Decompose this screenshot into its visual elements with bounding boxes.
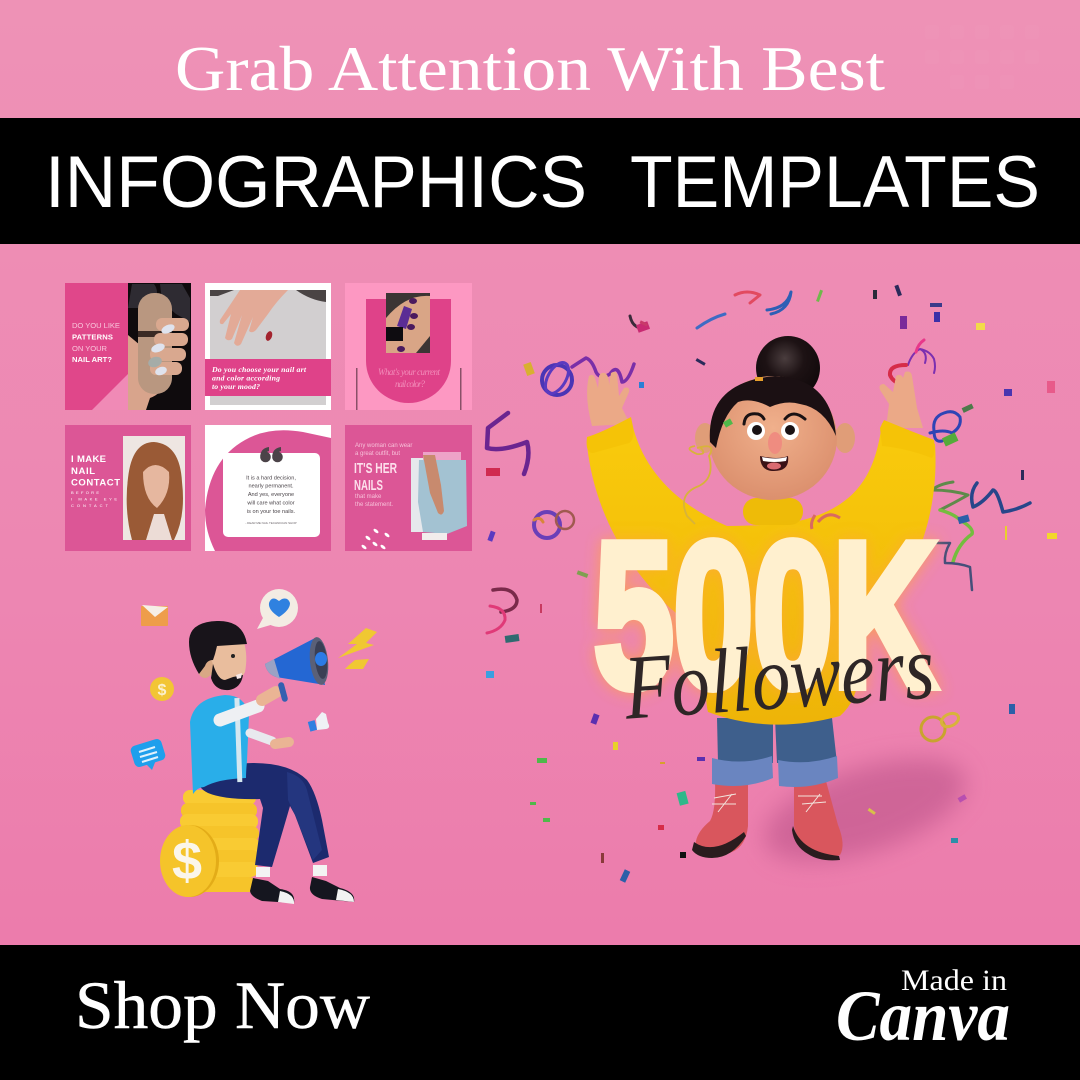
icon: thumbs up [308,712,329,732]
panel: current nail color [345,283,472,410]
big number: 500K: 500K [594,500,936,730]
panel: patterns on your nail art: NAIL ART? [72,355,112,364]
panel: hard decision quote: It is a hard decision, [246,476,296,482]
panel: choose your nail art: Do you choose your nail art [211,365,307,374]
badge: Made in Canva: Canva [836,976,1010,1056]
panel: current nail color: What's your current [378,367,440,377]
hair bun [756,336,820,400]
coin stack [180,790,260,892]
gold streamer [684,446,711,524]
shoes [250,865,354,904]
shorts and cuffs [712,718,838,787]
panel: hard decision quote: will care what color [246,500,295,506]
collar [743,498,803,525]
panel: hard decision quote [205,425,331,551]
face [744,414,805,471]
panel: patterns on your nail art: DO YOU LIKE [72,321,120,330]
panel: I make nail contact: I MAKE EYE [71,496,117,502]
icon: dollar coin small [150,677,174,701]
panel: it's her nails: NAILS [354,477,383,494]
big dollar coin [160,825,219,897]
panel: patterns on your nail art: PATTERNS [72,332,113,342]
panel: it's her nails: a great outfit, but [355,451,400,457]
panel: choose your nail art: and color according [212,374,280,382]
panel: I make nail contact: CONTACT [71,503,109,508]
heading: Infographics Templates [45,142,1040,223]
hair [710,376,836,448]
sleeve cuffs [587,417,935,458]
ears [695,423,855,453]
badge: Made in Canva: Made in [901,964,1007,997]
panel: it's her nails: Any woman can wear [355,443,412,449]
illustration: woman character [587,336,978,882]
panel: it's her nails: IT'S HER [354,460,397,477]
heading: Infographics Templates: TEMPLATES [630,142,1040,223]
script: Followers: Followers [620,615,937,739]
right hand [880,372,923,428]
panel: hard decision quote: - DEAR ME NAIL TECHNICIAN SHOP [245,521,297,525]
panel: it's her nails [345,425,472,551]
panel: choose your nail art [205,283,331,410]
arms and sweater [587,423,936,725]
call to action: Shop Now: Shop Now [75,967,370,1043]
panel: hard decision quote: is on your toe nails. [247,509,296,515]
coral streamer [811,515,840,529]
panel: I make nail contact: NAIL [71,466,95,477]
boots [692,780,843,860]
thumbnail grid [65,283,472,551]
panel: I make nail contact: CONTACT [71,478,120,488]
panel: I make nail contact: BEFORE [71,490,99,495]
panel: I make nail contact [65,425,191,551]
icon: chat bubble [129,738,167,770]
panel: patterns on your nail art [65,283,191,410]
head [709,376,837,500]
shadow [752,738,978,882]
sleeves and arms [220,692,289,744]
illustration: man with megaphone sitting on coins [129,589,377,904]
title: Grab Attention With Best: Grab Attention With Best [175,33,885,104]
panel: it's her nails: the statement. [355,502,393,508]
icon: lightning bolts [338,628,377,669]
panel: it's her nails: that make [355,494,382,500]
panel: hard decision quote: And yes, everyone [248,492,294,498]
megaphone [265,636,330,702]
panel: choose your nail art: to your mood? [212,382,260,391]
icon: heart speech bubble [257,589,298,629]
icon: envelope [141,605,168,626]
heading: Infographics Templates: INFOGRAPHICS [45,142,587,223]
trousers [198,763,329,867]
streamers [487,292,1030,741]
head with beard [189,621,247,690]
panel: current nail color: nail color? [395,379,426,389]
left hand [587,372,630,426]
big dollar coin: $ [172,831,202,891]
big number: 500K: 500K [594,500,936,730]
confetti pieces [486,285,1057,883]
panel: patterns on your nail art: ON YOUR [72,344,108,353]
icon: dollar coin small: $ [158,682,167,699]
shirt [190,695,249,794]
footer band [0,945,1080,1080]
panel: I make nail contact: I MAKE [71,454,106,465]
black banner [0,118,1080,244]
panel: hard decision quote: nearly permanent. [248,484,294,490]
